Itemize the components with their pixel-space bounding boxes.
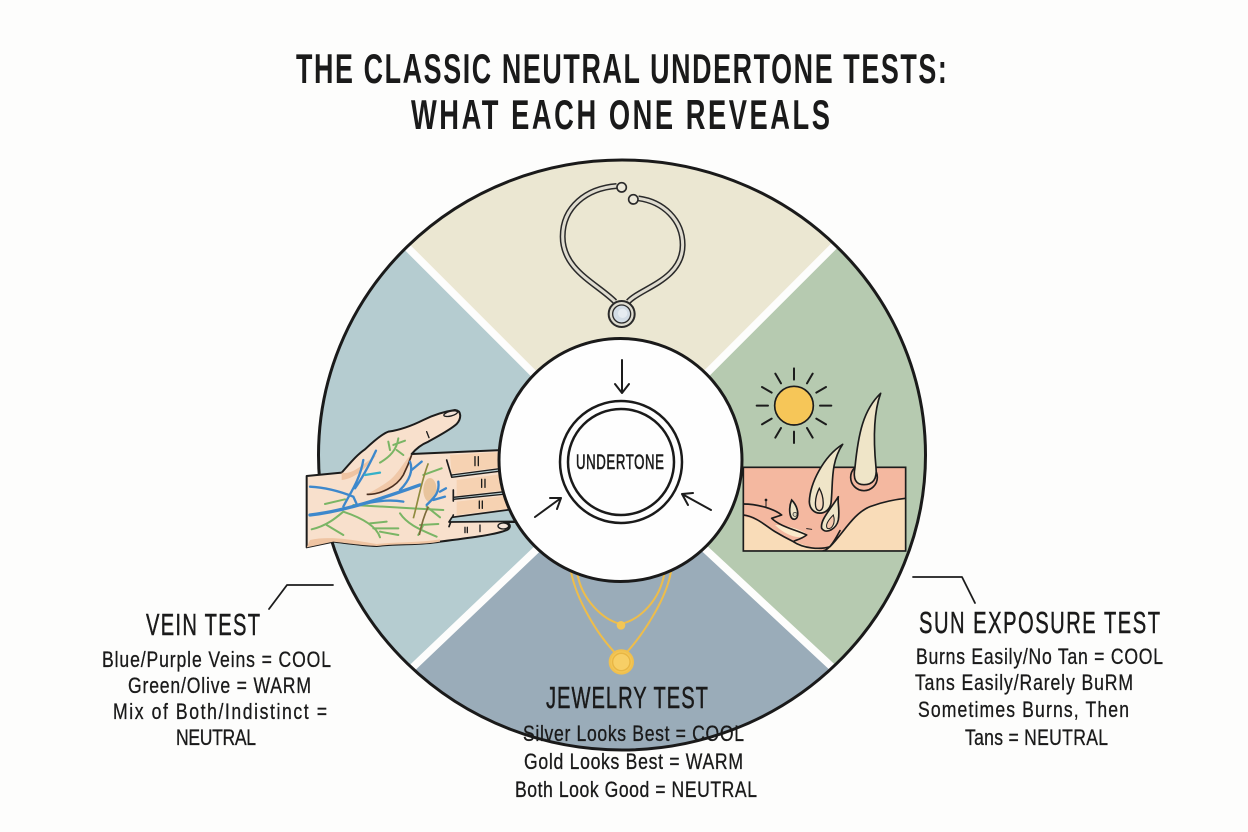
callout: vein test: NEUTRAL bbox=[176, 726, 256, 751]
blue veins bbox=[310, 451, 446, 515]
callout: sun exposure test bbox=[913, 577, 1163, 751]
concentric rings bbox=[560, 401, 682, 523]
callout: vein test: Blue/Purple Veins = COOL bbox=[102, 648, 331, 673]
callout: sun exposure test: Burns Easily/No Tan = COOL bbox=[916, 645, 1163, 670]
callout: jewelry test: JEWELRY TEST bbox=[546, 680, 708, 715]
title bbox=[296, 46, 947, 138]
finger gaps bbox=[447, 460, 520, 527]
callout: sun exposure test: SUN EXPOSURE TEST bbox=[919, 605, 1160, 640]
callout: jewelry test bbox=[515, 680, 757, 803]
title: THE CLASSIC NEUTRAL UNDERTONE TESTS: bbox=[296, 46, 947, 93]
callout: vein test bbox=[102, 585, 333, 751]
icon: sun and skin cross-section bbox=[743, 368, 906, 551]
hair follicles and droplets bbox=[790, 393, 881, 531]
callout: vein test: VEIN TEST bbox=[146, 607, 260, 642]
callout: sun exposure test: Tans Easily/Rarely BuRM bbox=[915, 671, 1133, 696]
callout: jewelry test: Silver Looks Best = COOL bbox=[523, 722, 744, 747]
wheel with four test segments bbox=[317, 158, 927, 752]
callout: jewelry test: Gold Looks Best = WARM bbox=[524, 750, 743, 775]
callout: sun exposure test: Sometimes Burns, Then bbox=[918, 698, 1129, 723]
sun bbox=[757, 368, 831, 443]
icon: hand with veins bbox=[307, 410, 520, 547]
icon: silver necklace bbox=[563, 183, 683, 327]
green veins bbox=[312, 438, 443, 537]
converging arrows bbox=[535, 360, 711, 517]
title: WHAT EACH ONE REVEALS bbox=[411, 91, 830, 138]
icon: gold necklace bbox=[571, 572, 671, 674]
callout: vein test: Mix of Both/Indistinct = bbox=[113, 700, 327, 725]
callout: sun exposure test: Tans = NEUTRAL bbox=[965, 726, 1108, 751]
callout: vein test: Green/Olive = WARM bbox=[128, 674, 311, 699]
callout: jewelry test: Both Look Good = NEUTRAL bbox=[515, 778, 757, 803]
center label: UNDERTONE bbox=[576, 450, 664, 474]
center circle: undertone bbox=[499, 338, 742, 582]
skin layers bbox=[743, 467, 906, 551]
